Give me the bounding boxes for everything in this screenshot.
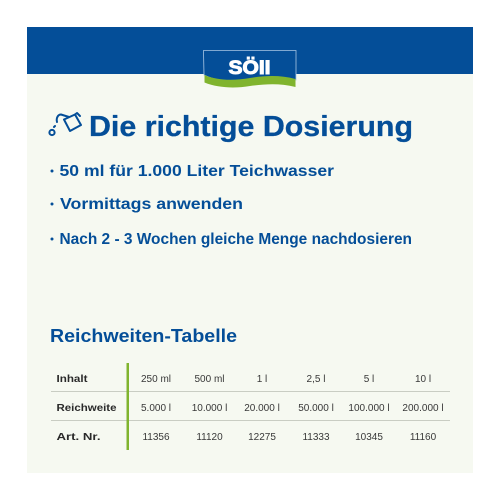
row: Inhalt [141, 374, 431, 385]
row: Reichweite: 20.000 l [244, 403, 280, 414]
logo: Söll [204, 50, 296, 87]
bullet 2: Vormittags anwenden [60, 196, 243, 213]
row: Art. Nr. [142, 432, 437, 443]
row labels: Reichweite [56, 402, 117, 414]
bullet 3: Nach 2 - 3 Wochen gleiche Menge nachdosieren [60, 231, 412, 248]
row: Inhalt: 1 l [257, 374, 267, 385]
icon: dosing cup pouring a drop [49, 113, 81, 135]
row: Inhalt: 5 l [364, 374, 374, 385]
green column divider [126, 363, 129, 450]
row: Inhalt: 2,5 l [307, 374, 325, 385]
row labels [56, 373, 117, 443]
panel: background [27, 27, 473, 473]
row labels: Art. Nr. [56, 431, 101, 443]
row: Reichweite: 50.000 l [298, 403, 334, 414]
row labels: Inhalt [56, 373, 88, 385]
row: Reichweite: 100.000 l [348, 403, 390, 414]
bullet 1: 50 ml für 1.000 Liter Teichwasser [60, 163, 334, 180]
heading: Die richtige Dosierung [89, 111, 413, 143]
header band [27, 27, 473, 74]
row: Inhalt: 500 ml [194, 374, 225, 385]
row: Inhalt: 250 ml [141, 374, 171, 385]
bullet list [50, 163, 412, 248]
row: Art. Nr.: 12275 [248, 432, 276, 443]
row: Art. Nr.: 11333 [302, 432, 330, 443]
row: Art. Nr.: 11356 [142, 432, 170, 443]
row: Art. Nr.: 10345 [355, 432, 383, 443]
row: Inhalt: 10 l [415, 374, 431, 385]
row: Reichweite: 200.000 l [402, 403, 444, 414]
row: Art. Nr.: 11120 [196, 432, 223, 443]
logo wordmark: SÖII [228, 58, 270, 79]
row: Art. Nr.: 11160 [410, 432, 437, 443]
row: Reichweite [141, 403, 444, 414]
row dividers [51, 391, 450, 421]
table heading: Reichweiten-Tabelle [50, 326, 237, 346]
row: Reichweite: 5.000 l [141, 403, 171, 414]
row: Reichweite: 10.000 l [192, 403, 227, 414]
table [51, 363, 450, 450]
